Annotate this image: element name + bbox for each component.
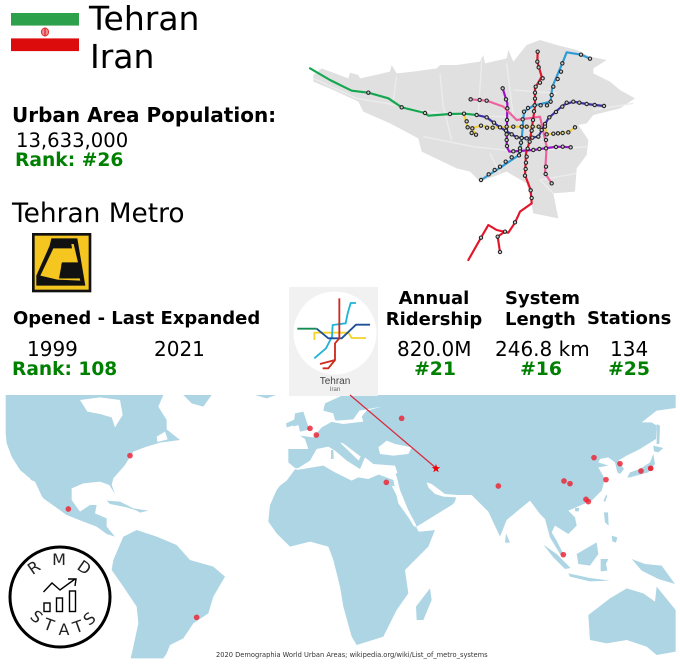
stations value: 134 bbox=[610, 337, 648, 361]
length rank: #16 bbox=[520, 359, 562, 380]
annual ridership heading bbox=[386, 288, 482, 330]
line 1 red bbox=[468, 52, 542, 260]
baltic sea bbox=[328, 407, 382, 424]
last expanded year: 2021 bbox=[154, 337, 205, 361]
ridership rank: #21 bbox=[414, 359, 456, 380]
japan honshu bbox=[627, 454, 655, 477]
mindanao bbox=[612, 536, 617, 543]
hokkaido bbox=[653, 446, 663, 452]
hainan bbox=[575, 508, 579, 511]
new guinea bbox=[632, 559, 675, 584]
italy bbox=[330, 444, 358, 466]
system length heading bbox=[505, 288, 580, 330]
greenland bbox=[183, 395, 212, 407]
ridership value: 820.0M bbox=[397, 337, 472, 361]
stations rank: #25 bbox=[608, 359, 650, 380]
africa bbox=[268, 465, 435, 645]
black sea bbox=[378, 441, 412, 456]
eurasia bbox=[288, 395, 676, 557]
line 3 light blue bbox=[481, 52, 590, 180]
north america bbox=[6, 395, 180, 537]
system length heading: Length bbox=[505, 309, 576, 330]
title: country: Iran bbox=[90, 37, 154, 76]
urban area population heading: Urban Area Population: bbox=[12, 103, 276, 127]
annual ridership heading: Ridership bbox=[386, 309, 482, 330]
sri lanka bbox=[505, 533, 510, 543]
gulf of st lawrence bbox=[157, 432, 168, 442]
rmd stats logo: S bbox=[79, 608, 99, 629]
sakhalin bbox=[657, 424, 660, 444]
line 5 green bbox=[310, 68, 477, 116]
east asia islands bbox=[543, 424, 675, 584]
system length heading: System bbox=[505, 288, 580, 309]
baja california gulf bbox=[29, 479, 43, 499]
australia bbox=[588, 587, 676, 655]
line 2 navy bbox=[477, 102, 604, 138]
metro schematic thumbnail: Iran bbox=[330, 387, 340, 393]
opened year: 1999 bbox=[27, 337, 78, 361]
system length value: 246.8 km bbox=[495, 337, 590, 361]
adriatic sea bbox=[340, 443, 361, 461]
metro schematic thumbnail: Tehran bbox=[320, 376, 350, 387]
title: city: Tehran bbox=[89, 0, 199, 38]
corsica and sardinia bbox=[331, 450, 334, 459]
red sea bbox=[392, 486, 417, 527]
gulf of aden bbox=[417, 503, 457, 532]
madagascar bbox=[416, 588, 432, 620]
rmd stats logo: T bbox=[69, 616, 86, 638]
annual ridership heading: Annual bbox=[399, 288, 469, 309]
data source credit: 2020 Demographia World Urban Areas; wikipedia.org/wiki/List_of_metro_systems bbox=[216, 651, 488, 659]
rmd stats logo: R bbox=[24, 557, 44, 578]
age rank: Rank: 108 bbox=[12, 359, 117, 380]
population value: 13,633,000 bbox=[16, 129, 128, 152]
cuba bbox=[107, 501, 140, 512]
persian gulf bbox=[427, 482, 457, 497]
mediterranean sea bbox=[297, 447, 397, 481]
taiwan bbox=[603, 495, 607, 501]
java bbox=[568, 573, 610, 581]
borneo bbox=[577, 542, 598, 566]
metro system name: Tehran Metro bbox=[12, 198, 185, 229]
population rank: Rank: #26 bbox=[15, 150, 123, 171]
south america bbox=[112, 530, 225, 658]
rmd stats logo: D bbox=[74, 556, 95, 579]
luzon bbox=[604, 512, 609, 526]
hispaniola bbox=[133, 508, 148, 513]
rmd stats logo: T bbox=[40, 614, 57, 636]
opened and last expanded heading: Opened - Last Expanded bbox=[13, 308, 260, 329]
line 6 pink bbox=[471, 99, 552, 183]
line 4 yellow bbox=[464, 114, 575, 134]
stations heading: Stations bbox=[587, 308, 671, 329]
line 7 purple bbox=[503, 88, 571, 152]
rmd stats logo: A bbox=[59, 620, 70, 639]
rmd stats logo: M bbox=[52, 550, 66, 569]
sumatra bbox=[543, 545, 571, 569]
rmd stats logo: S bbox=[27, 606, 47, 627]
stations bbox=[367, 50, 606, 254]
ireland bbox=[286, 419, 295, 427]
iceland bbox=[255, 395, 276, 398]
united kingdom bbox=[293, 412, 311, 432]
hudson bay bbox=[80, 397, 123, 427]
city area outline bbox=[313, 40, 635, 218]
sulawesi bbox=[601, 559, 608, 571]
